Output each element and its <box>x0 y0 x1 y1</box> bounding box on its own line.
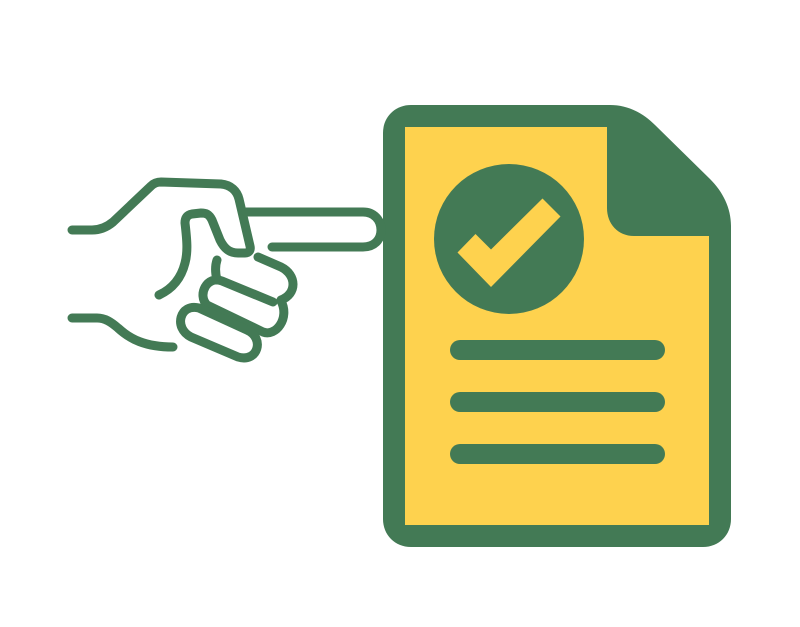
icon: document <box>383 105 731 547</box>
badge circle <box>434 164 584 314</box>
text lines <box>450 340 665 464</box>
pointing finger <box>246 212 381 247</box>
document outline <box>383 105 731 547</box>
curled finger 2 <box>203 260 284 333</box>
wrist lower edge <box>72 318 173 347</box>
curled finger 3 <box>181 307 257 358</box>
document page <box>405 127 709 525</box>
check mark <box>458 198 560 287</box>
icon: pointing hand <box>72 182 381 358</box>
icon: check badge <box>434 164 584 314</box>
back of hand and thumb <box>72 182 250 295</box>
curled finger 1 <box>258 257 293 300</box>
